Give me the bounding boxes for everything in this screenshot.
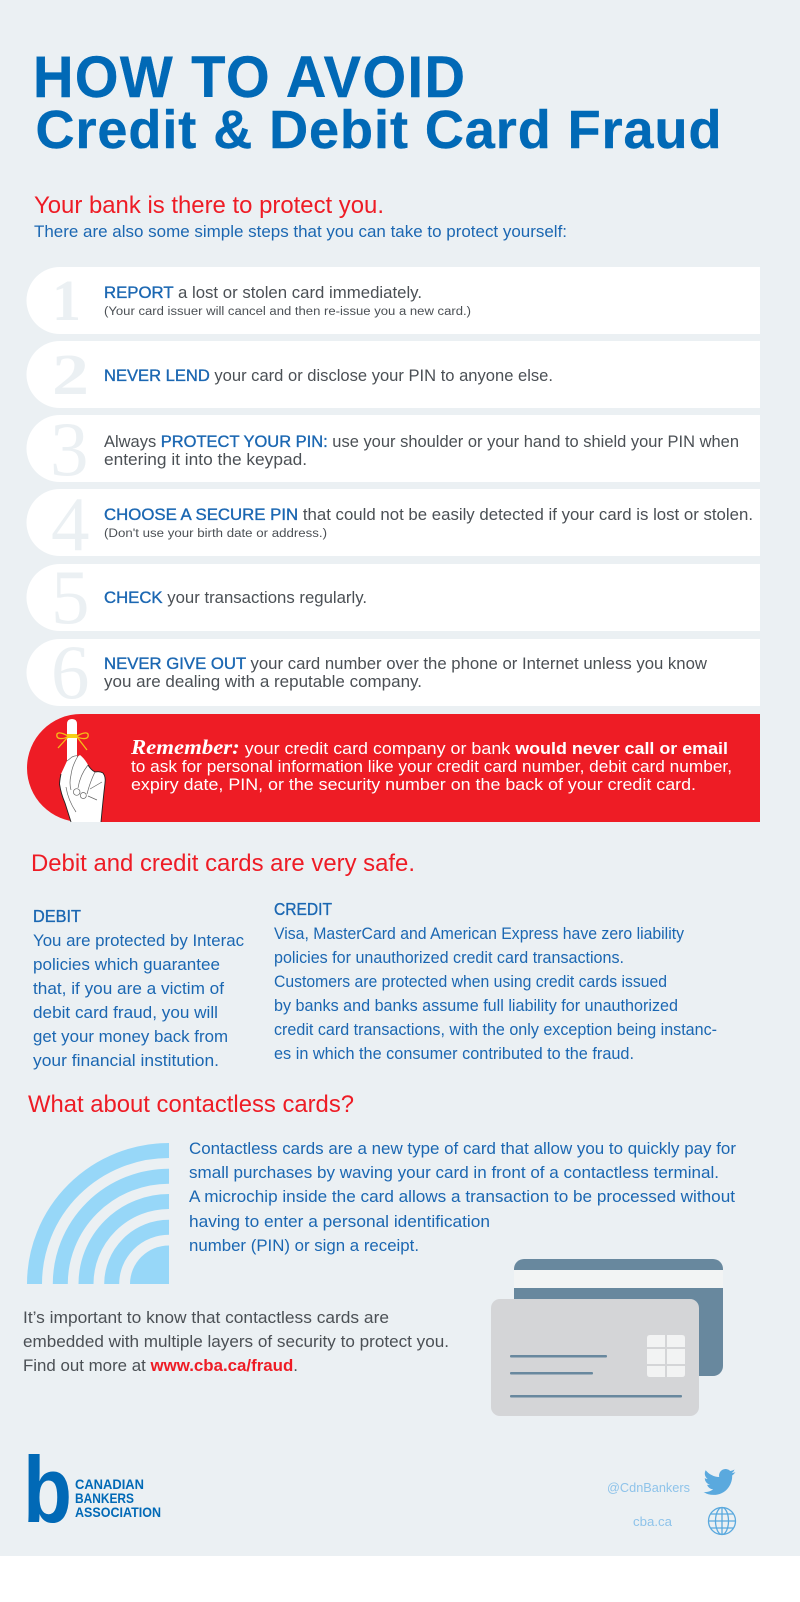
credit column: by banks and banks assume full liability for unauthorized	[274, 997, 678, 1015]
step 2 text: NEVER LEND your card or disclose your PIN to anyone else.	[104, 367, 553, 385]
debit column: You are protected by Interac	[33, 932, 244, 950]
step 3 text: entering it into the keypad.	[104, 451, 307, 469]
icon: twitter bird	[704, 1469, 735, 1495]
title: HOW TO AVOID	[33, 45, 465, 110]
step 4 text: CHOOSE A SECURE PIN that could not be easily detected if your card is lost or stolen.	[104, 506, 753, 524]
icon: bank cards	[491, 1259, 723, 1416]
contactless heading: What about contactless cards?	[28, 1091, 354, 1118]
debit column: DEBIT	[33, 906, 81, 926]
credit column: credit card transactions, with the only exception being instanc-	[274, 1021, 717, 1039]
logo: Canadian Bankers Association: ASSOCIATION	[75, 1504, 161, 1520]
step 6 text: you are dealing with a reputable company.	[104, 673, 422, 691]
credit column: es in which the consumer contributed to the fraud.	[274, 1045, 634, 1063]
logo: Canadian Bankers Association	[23, 1437, 161, 1542]
step 2 panel	[26, 341, 760, 408]
credit column: Visa, MasterCard and American Express have zero liability	[274, 925, 685, 943]
number 1: 1	[52, 268, 81, 333]
security note: embedded with multiple layers of security to protect you.	[23, 1333, 449, 1351]
step 6 text: NEVER GIVE OUT your card number over the phone or Internet unless you know	[104, 655, 707, 673]
contactless description: small purchases by waving your card in front of a contactless terminal.	[189, 1164, 719, 1182]
remember text: to ask for personal information like your credit card number, debit card number,	[131, 758, 732, 776]
step 6 text	[104, 655, 707, 691]
contactless description	[189, 1140, 737, 1255]
contactless description: having to enter a personal identification	[189, 1213, 490, 1231]
remember panel	[27, 714, 760, 822]
step 1 text: REPORT a lost or stolen card immediately.	[104, 284, 422, 302]
credit column	[274, 899, 717, 1063]
icon: globe	[708, 1508, 736, 1534]
debit column	[33, 906, 244, 1070]
number 2: 2	[52, 342, 89, 407]
step 4 text	[104, 506, 753, 540]
step 3 panel	[26, 406, 760, 492]
debit column: policies which guarantee	[33, 956, 220, 974]
contactless description: A microchip inside the card allows a transaction to be processed without	[189, 1188, 735, 1206]
security note: Find out more at www.cba.ca/fraud.	[23, 1357, 298, 1375]
title: Credit & Debit Card Fraud	[36, 100, 722, 160]
credit column: CREDIT	[274, 899, 332, 919]
icon: contactless arcs	[34, 1150, 169, 1284]
logo: Canadian Bankers Association: CANADIAN	[75, 1476, 144, 1492]
icon: hand with ribbon on finger	[57, 719, 105, 822]
step 4 text: (Don't use your birth date or address.)	[104, 528, 327, 540]
step 4 panel	[26, 481, 760, 567]
intro text: There are also some simple steps that you can take to protect yourself:	[34, 222, 567, 241]
safety heading: Debit and credit cards are very safe.	[31, 850, 415, 877]
step 5 text: CHECK your transactions regularly.	[104, 589, 367, 607]
title	[33, 45, 722, 160]
website: cba.ca	[633, 1514, 673, 1529]
debit column: your financial institution.	[33, 1052, 219, 1070]
step 5 panel	[26, 554, 760, 640]
remember text: expiry date, PIN, or the security number on the back of your credit card.	[131, 776, 696, 794]
twitter handle: @CdnBankers	[607, 1480, 690, 1495]
step 3 text	[104, 433, 739, 469]
debit column: debit card fraud, you will	[33, 1004, 218, 1022]
security note	[23, 1309, 449, 1375]
debit column: that, if you are a victim of	[33, 980, 224, 998]
number 3: 3	[50, 406, 88, 492]
debit column: get your money back from	[33, 1028, 228, 1046]
number 5: 5	[51, 554, 90, 640]
step 3 text: Always PROTECT YOUR PIN: use your shoulder or your hand to shield your PIN when	[104, 433, 739, 451]
credit column: Customers are protected when using credit cards issued	[274, 973, 667, 991]
number 6: 6	[51, 629, 90, 715]
remember text	[130, 735, 732, 794]
logo: Canadian Bankers Association: b	[23, 1437, 72, 1542]
logo: Canadian Bankers Association: BANKERS	[75, 1490, 134, 1506]
credit column: policies for unauthorized credit card transactions.	[274, 949, 624, 967]
step 1 text: (Your card issuer will cancel and then re-issue you a new card.)	[104, 306, 471, 318]
number 4: 4	[51, 481, 90, 567]
remember text: Remember: your credit card company or bank would never call or email	[130, 735, 728, 759]
contactless description: Contactless cards are a new type of card that allow you to quickly pay for	[189, 1140, 737, 1158]
intro heading: Your bank is there to protect you.	[34, 192, 384, 219]
security note: It’s important to know that contactless cards are	[23, 1309, 389, 1327]
step 6 panel	[26, 629, 760, 715]
step 1 panel	[26, 267, 760, 334]
contactless description: number (PIN) or sign a receipt.	[189, 1237, 419, 1255]
step 1 text	[104, 284, 471, 318]
